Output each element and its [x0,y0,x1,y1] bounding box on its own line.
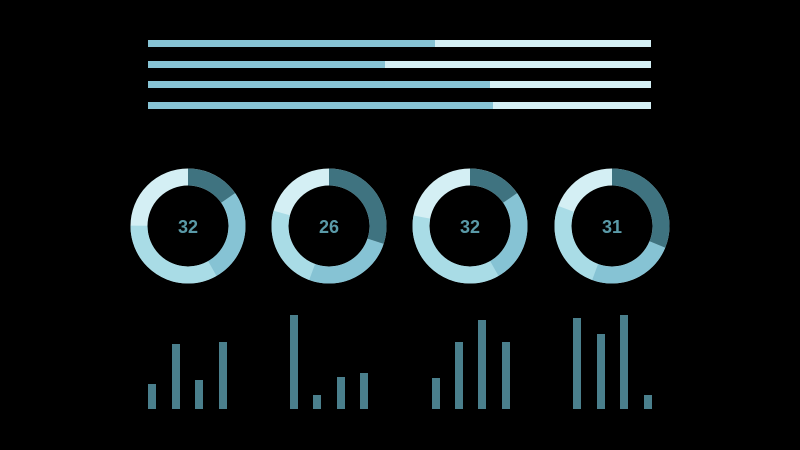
donut 4: 31: 31 [602,217,622,237]
progress bar 3 [148,81,651,88]
progress bar 2 [148,61,651,68]
donut 3: 32: 32 [460,217,480,237]
progress bars [148,40,651,109]
donut 2: 26 [280,177,378,275]
donut 2: 26: 26 [319,217,339,237]
column chart 3 [432,320,510,409]
donut 4: 31 [563,177,661,275]
column chart 2 [290,315,368,409]
column chart 4 [573,315,652,409]
column charts [148,315,652,409]
donut charts [139,177,661,275]
progress bar 1 [148,40,651,47]
donut 3: 32 [421,177,519,275]
column chart 1 [148,342,227,409]
donut 1: 32: 32 [178,217,198,237]
donut 1: 32 [139,177,237,275]
progress bar 4 [148,102,651,109]
